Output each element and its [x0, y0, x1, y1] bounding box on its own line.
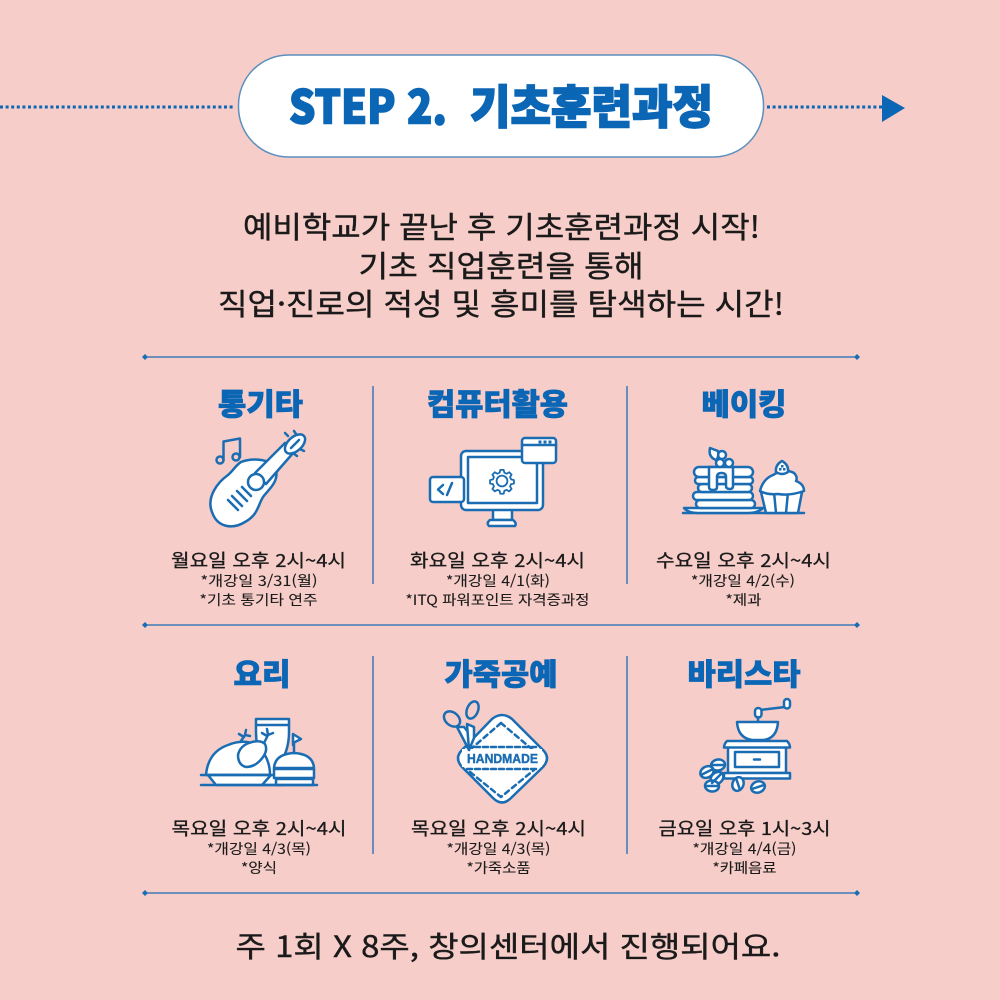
schedule: 베이킹: [656, 547, 831, 610]
schedule: 바리스타: [658, 815, 830, 878]
heading: 베이킹: 베이킹: [702, 380, 786, 424]
schedule: 통기타: [171, 547, 346, 610]
schedule: 베이킹: *개강일 4/2(수): [691, 571, 795, 591]
icon: coffee grinder: [698, 699, 790, 795]
icon: computer: [430, 438, 556, 526]
schedule: 요리: *개강일 4/3(목): [207, 839, 311, 859]
schedule: 컴퓨터활용: *개강일 4/1(화): [446, 571, 550, 591]
schedule: 요리: *양식: [241, 858, 277, 878]
schedule: 가죽공예: [411, 815, 586, 878]
icon: baking: [683, 448, 804, 513]
panel: 컴퓨터활용: [406, 380, 590, 610]
intro text: 기초 직업훈련을 통해: [358, 242, 644, 286]
panel: 요리: [172, 650, 346, 878]
intro text: 예비학교가 끝난 후 기초훈련과정 시작!: [243, 203, 760, 247]
schedule: 바리스타: *개강일 4/4(금): [692, 839, 796, 859]
panel: 통기타: [171, 380, 346, 610]
schedule: 바리스타: 금요일 오후 1시~3시: [658, 815, 830, 841]
heading: 컴퓨터활용: 컴퓨터활용: [427, 380, 568, 424]
schedule: 베이킹: *제과: [726, 590, 762, 610]
schedule: 요리: 목요일 오후 2시~4시: [172, 815, 346, 841]
title pill: STEP 2.: [289, 72, 447, 138]
schedule: 컴퓨터활용: *ITQ 파워포인트 자격증과정: [406, 590, 590, 610]
schedule: 요리: [172, 815, 346, 878]
heading: 요리: 요리: [234, 650, 290, 694]
schedule: 통기타: *개강일 3/31(월): [200, 571, 318, 591]
title pill: [238, 55, 764, 157]
intro text: 직업·진로의 적성 및 흥미를 탐색하는 시간!: [218, 280, 784, 324]
schedule: 가죽공예: *개강일 4/3(목): [446, 839, 550, 859]
icon: guitar: [210, 431, 309, 526]
panel: 베이킹: [656, 380, 831, 610]
schedule: 베이킹: 수요일 오후 2시~4시: [656, 547, 831, 573]
footer note: 주 1회 X 8주, 창의센터에서 진행되어요.: [236, 924, 780, 966]
icon: handmade leather: HANDMADE: [467, 751, 538, 766]
title pill: 기초훈련과정: [470, 72, 713, 138]
intro text: [218, 203, 784, 324]
schedule: 통기타: *기초 통기타 연주: [200, 590, 318, 610]
icon: handmade leather: [441, 700, 547, 802]
schedule: 가죽공예: *가죽소품: [466, 858, 531, 878]
schedule: 바리스타: *카페음료: [712, 858, 777, 878]
schedule: 가죽공예: 목요일 오후 2시~4시: [411, 815, 586, 841]
panel: 바리스타: [658, 650, 830, 878]
schedule: 컴퓨터활용: [406, 547, 590, 610]
icon: food: [201, 719, 317, 785]
schedule: 통기타: 월요일 오후 2시~4시: [171, 547, 346, 573]
arrow head: [882, 95, 905, 122]
heading: 바리스타: 바리스타: [688, 650, 801, 694]
schedule: 컴퓨터활용: 화요일 오후 2시~4시: [410, 547, 585, 573]
panel: 가죽공예: [411, 650, 586, 878]
heading: 가죽공예: 가죽공예: [444, 650, 558, 694]
heading: 통기타: 통기타: [218, 380, 303, 424]
